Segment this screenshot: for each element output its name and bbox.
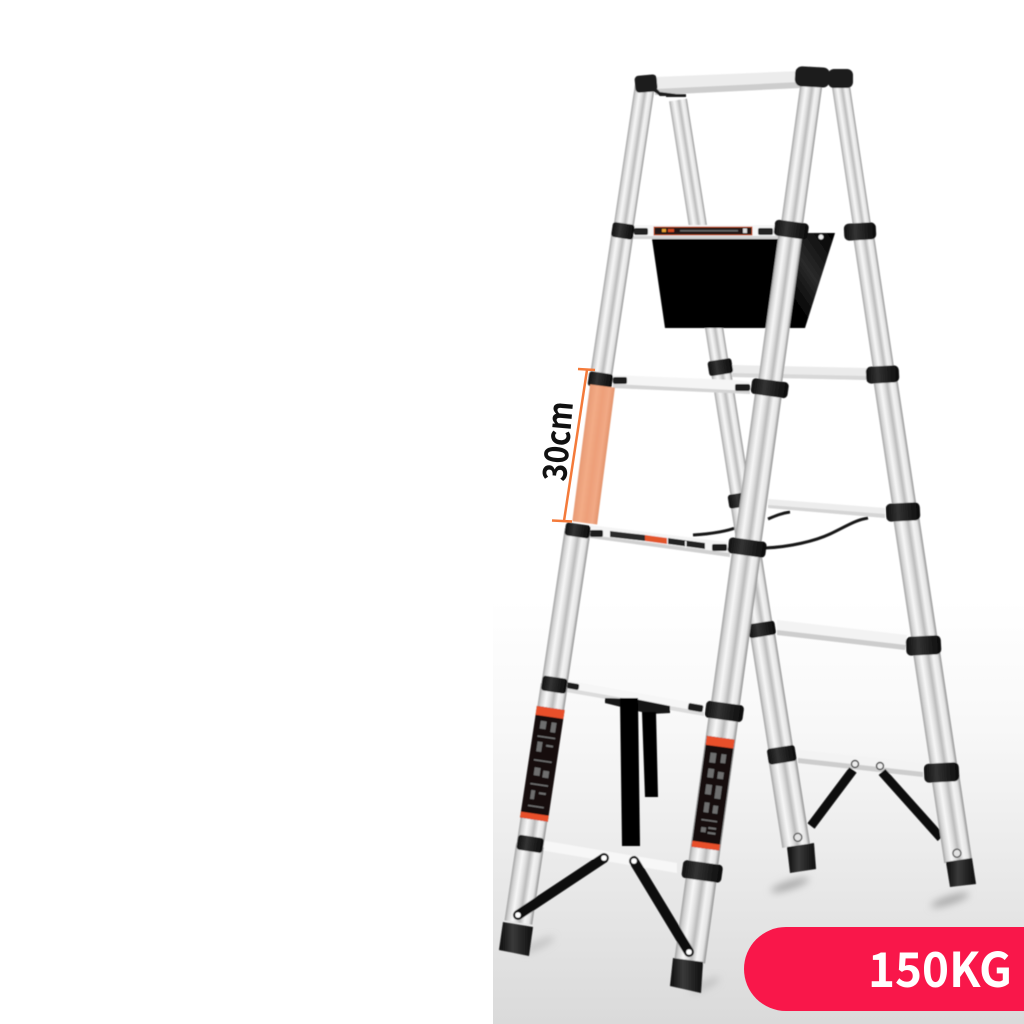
back spreader bars [811,770,941,838]
tray rung [628,225,790,239]
30cm label: 30cm [528,399,583,483]
rail: front left [505,83,659,925]
rail: back right [826,78,972,863]
collars: back right [844,222,960,783]
feet: front [499,922,703,993]
tray wing hole [818,234,824,240]
feet: back [787,843,976,887]
tray front panel [652,239,783,328]
safety sticker right [691,736,735,851]
back rungs [732,365,923,777]
top cap [655,71,800,95]
30cm dimension marker [528,369,595,522]
front spreader bars [515,855,692,955]
straps [605,698,670,846]
back spreader holes [852,760,884,770]
orange highlighted tube section [572,384,615,524]
front rungs [540,71,800,873]
rail: front right [670,77,832,964]
cable strap [693,512,868,548]
rung 3 labels [590,530,727,551]
tray side wing [770,233,835,328]
ladder [499,66,976,993]
top corner caps [634,66,853,97]
rung 2 [613,375,750,394]
foot shadows [520,875,970,995]
safety sticker left [520,706,565,822]
rung 3 [590,525,730,557]
collars [516,221,637,853]
badge label: 150KG [868,931,1012,1001]
badge: 150KG [744,927,1024,1011]
rung 5 [540,840,677,873]
rung 4 [566,680,704,716]
rail: back left [664,98,810,848]
background gradient floor [493,600,1024,1024]
collars [681,219,812,883]
